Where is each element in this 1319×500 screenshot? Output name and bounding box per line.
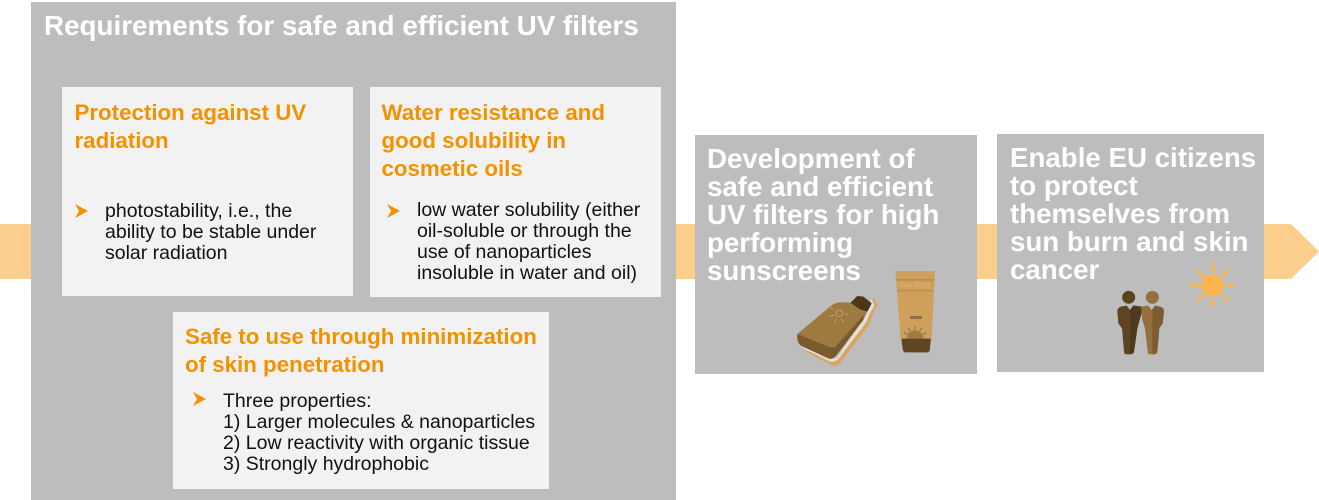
card: protection against UV radiation: [62, 87, 353, 296]
panel: requirements: [31, 2, 676, 500]
panel heading: sunscreens: [707, 255, 861, 286]
card text: insoluble in water and oil): [417, 262, 637, 284]
arrow: process flow background: [0, 224, 1319, 279]
card heading: radiation: [74, 128, 169, 153]
bullet icon: [387, 204, 400, 218]
bullet icon: [193, 392, 206, 406]
panel heading: themselves from: [1010, 198, 1230, 229]
card text: 1) Larger molecules & nanoparticles: [223, 411, 535, 433]
icon: sunscreen bottle: [797, 296, 878, 366]
card text: [417, 199, 640, 284]
panel heading: cancer: [1010, 254, 1099, 285]
card: safe to use: [173, 312, 549, 489]
card heading: Safe to use through minimization: [185, 324, 537, 349]
card text: [105, 200, 316, 264]
panel heading: [707, 143, 939, 286]
card text: ability to be stable under: [105, 221, 316, 243]
panel heading: safe and efficient: [707, 171, 933, 202]
card heading: cosmetic oils: [382, 156, 523, 181]
card text: solar radiation: [105, 242, 227, 264]
panel heading: Development of: [707, 143, 915, 174]
panel heading: to protect: [1010, 170, 1138, 201]
icon: sun: [1190, 263, 1235, 308]
card: water resistance: [370, 87, 661, 297]
card heading: [74, 100, 306, 153]
panel heading: UV filters for high: [707, 199, 939, 230]
card heading: of skin penetration: [185, 352, 384, 377]
panel heading: sun burn and skin: [1010, 226, 1248, 257]
card heading: Protection against UV: [74, 100, 306, 125]
bullet icon: [75, 204, 88, 218]
card text: use of nanoparticles: [417, 241, 592, 263]
panel heading: performing: [707, 227, 853, 258]
icon: two people: [1117, 290, 1164, 354]
icon: sun block tube: Sun Block: [899, 283, 931, 290]
card text: Three properties:: [223, 390, 372, 412]
card text: photostability, i.e., the: [105, 200, 292, 222]
panel heading: [1010, 142, 1256, 285]
card heading: Water resistance and: [382, 100, 605, 125]
card text: [223, 390, 535, 475]
card text: 3) Strongly hydrophobic: [223, 453, 429, 475]
panel: enable EU citizens: [997, 134, 1264, 372]
panel heading: Enable EU citizens: [1010, 142, 1256, 173]
card text: oil-soluble or through the: [417, 220, 632, 242]
card text: 2) Low reactivity with organic tissue: [223, 432, 530, 454]
card text: low water solubility (either: [417, 199, 640, 221]
card heading: good solubility in: [382, 128, 566, 153]
icon: sun block tube: [895, 271, 935, 352]
card heading: [382, 100, 605, 181]
panel: development: [695, 135, 977, 374]
card heading: [185, 324, 537, 377]
title: Requirements for safe and efficient UV filters: [44, 10, 639, 41]
